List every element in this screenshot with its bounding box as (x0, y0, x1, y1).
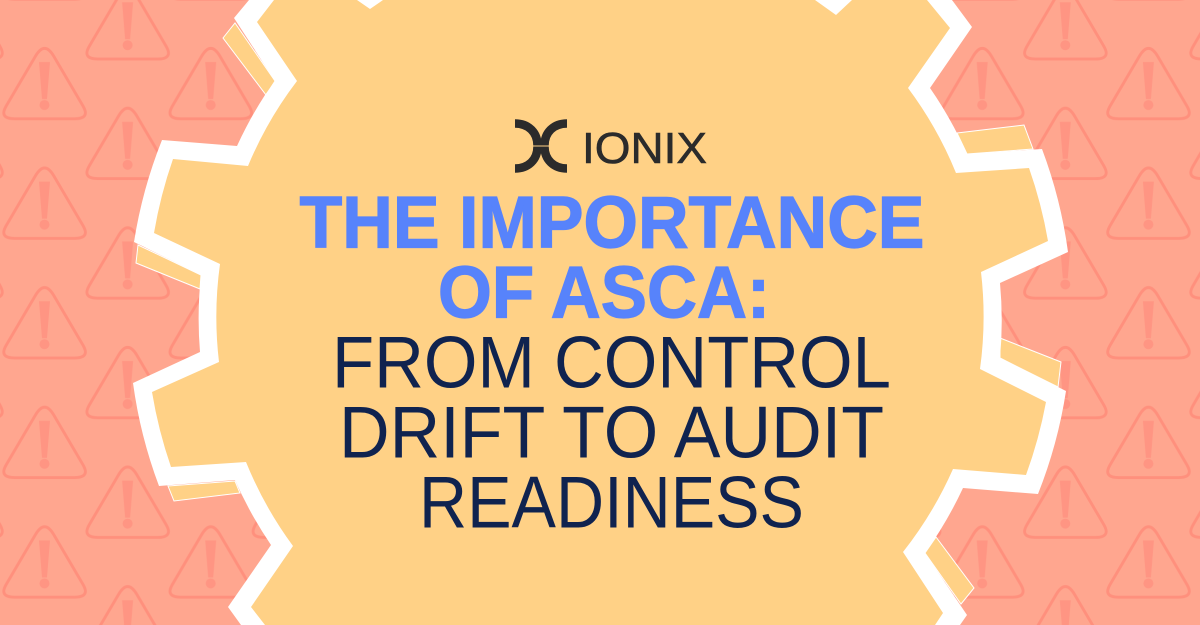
logo: IONIX (515, 124, 707, 173)
icon: IONIX mark (515, 124, 567, 168)
offset gear teeth shadows (136, 23, 1061, 604)
title: subtitle lines: READINESS (419, 460, 804, 543)
gear outline (133, 0, 1068, 625)
title (300, 182, 924, 543)
title: highlighted lines: OF ASCA: (438, 252, 770, 334)
gear body (152, 0, 1048, 625)
title: subtitle lines: DRIFT TO AUDIT (339, 391, 884, 474)
title: highlighted lines (300, 182, 924, 334)
warning icon pattern: left (0, 0, 600, 625)
logo wordmark: IONIX (582, 124, 707, 173)
title: subtitle lines: FROM CONTROL (332, 321, 891, 404)
title: highlighted lines: THE IMPORTANCE (300, 182, 924, 264)
warning icon pattern: right (600, 0, 1200, 625)
title: subtitle lines (332, 321, 891, 543)
gear top notches (357, 0, 852, 15)
